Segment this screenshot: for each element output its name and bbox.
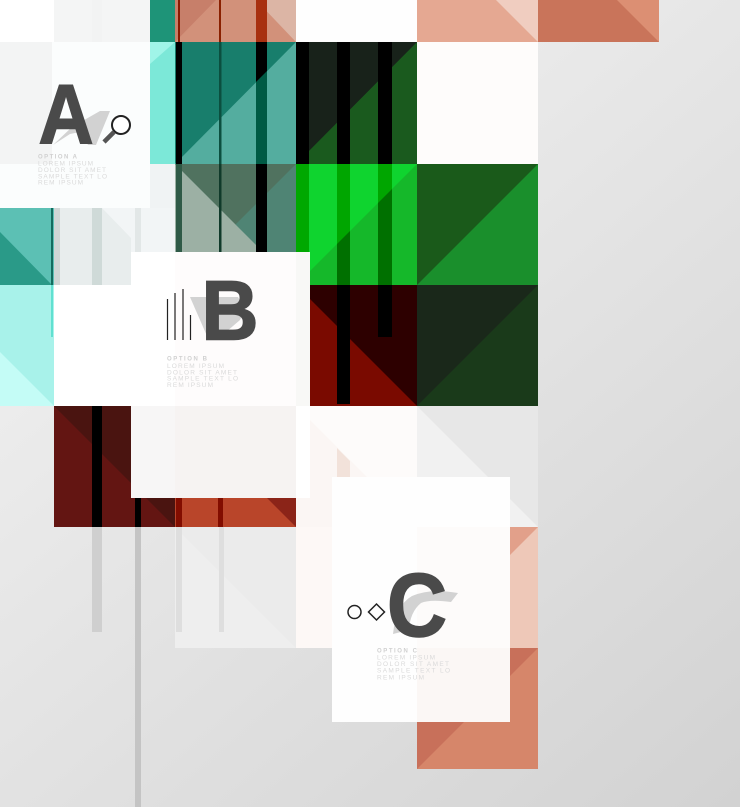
terracotta tile [417, 648, 538, 769]
panel: option B [131, 252, 310, 498]
text block A: OPTION A [38, 154, 78, 160]
letter B shadow [190, 297, 243, 336]
pale tile top right [417, 42, 538, 164]
letter A shadow [53, 111, 110, 145]
orange-red tile [175, 406, 296, 527]
grey-green tile [175, 164, 296, 285]
teal tile with stripes [175, 42, 296, 164]
letter C shadow [393, 591, 458, 634]
text block B: LOREM IPSUM [167, 363, 224, 370]
text block A: DOLOR SIT AMET [38, 167, 106, 174]
bright green tile with stripes [296, 164, 417, 285]
green triangle tile [417, 164, 538, 285]
panel: option C [332, 477, 510, 722]
salmon tile [417, 527, 538, 648]
aqua strip tile [150, 42, 175, 164]
dark green tile with black stripes [296, 42, 417, 164]
panel: option A [0, 42, 150, 208]
text block B: DOLOR SIT AMET [167, 370, 237, 376]
pale translucent tile [54, 164, 175, 285]
letter C: C [387, 556, 447, 656]
white tile [54, 285, 175, 406]
teal tile left [0, 208, 54, 285]
text block A: LOREM IPSUM [38, 160, 93, 168]
text block B: SAMPLE TEXT LO [167, 376, 238, 382]
text block C: LOREM IPSUM [377, 654, 435, 662]
light grey triangle tile [417, 406, 538, 527]
letter B: B [202, 264, 258, 358]
text block C: REM IPSUM [377, 674, 424, 682]
icon: magnifier [104, 116, 130, 142]
very dark green tile [417, 285, 538, 406]
text block A: SAMPLE TEXT LO [38, 174, 107, 180]
aqua tile left [0, 285, 54, 406]
pale pink tile lower [296, 527, 417, 648]
top row of coloured tiles [0, 0, 659, 42]
text block C [377, 648, 450, 682]
icon: vertical bars [168, 289, 190, 340]
maroon tile [54, 406, 175, 527]
text block A: REM IPSUM [38, 180, 83, 186]
text block B: REM IPSUM [167, 382, 213, 389]
icon: circle and diamond [348, 604, 384, 620]
text block A [38, 154, 107, 186]
pale grey tile lower [175, 527, 296, 648]
letter A: A [38, 68, 94, 162]
text block B [167, 356, 238, 389]
text block B: OPTION B [167, 356, 208, 362]
text block C: SAMPLE TEXT LO [377, 668, 450, 674]
long and short grey stripes below the grid [92, 527, 141, 807]
pale pink tile [296, 406, 417, 527]
dark red tile with stripes [296, 285, 417, 406]
text block C: DOLOR SIT AMET [377, 661, 449, 668]
text block C: OPTION C [377, 648, 418, 654]
